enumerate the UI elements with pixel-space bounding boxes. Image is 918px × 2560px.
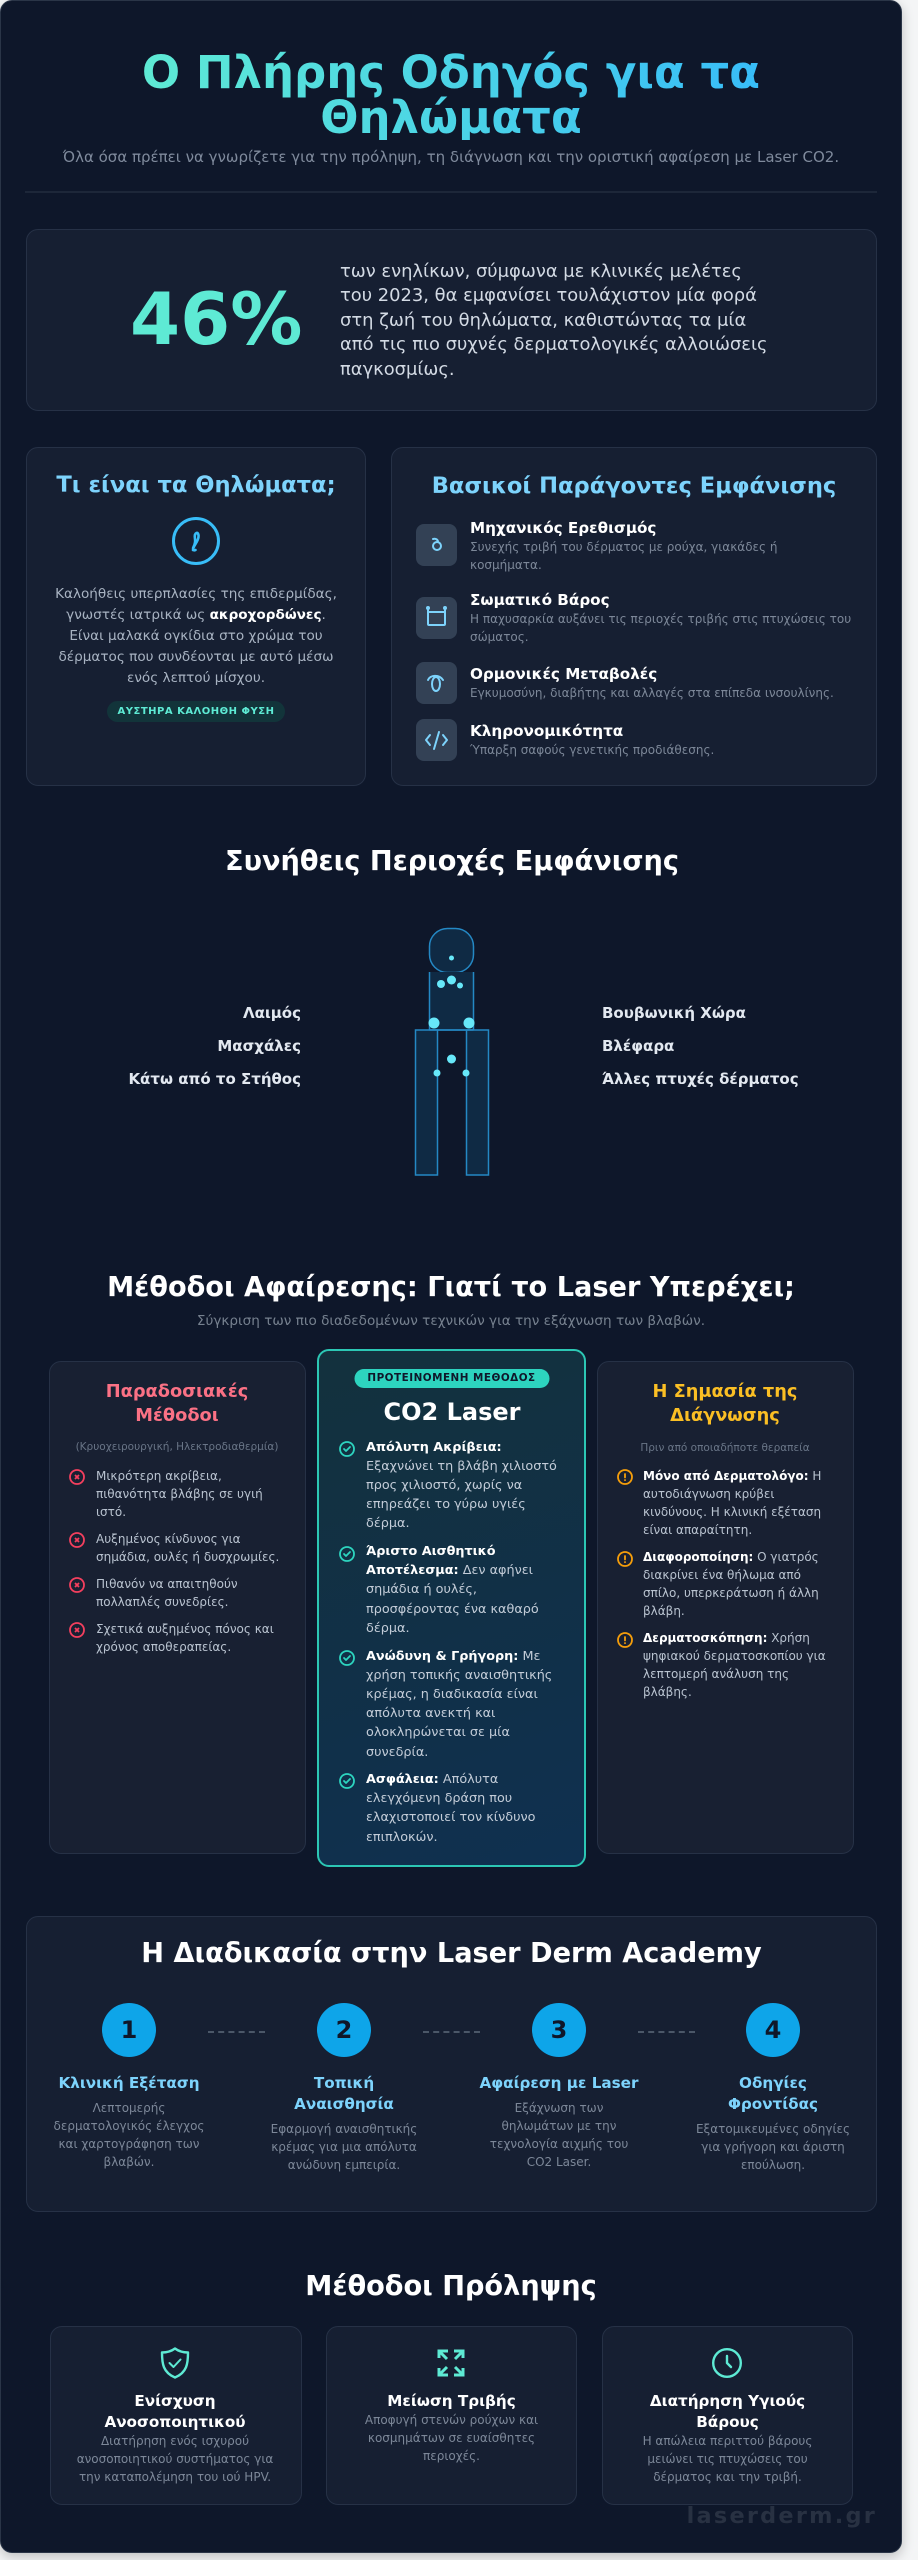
step 2 number: 2 — [336, 2016, 352, 2044]
factor text: hormonal changes: Εγκυμοσύνη, διαβήτης και αλλαγές στα επίπεδα ινσουλίνης. — [470, 686, 834, 700]
labels: left body areas: Μασχάλες — [217, 1037, 301, 1055]
step 3 number: 3 — [551, 2016, 567, 2044]
list item 2: Αυξημένος κίνδυνος για — [96, 1532, 241, 1546]
panel: CO2 laser — [317, 1349, 586, 1867]
note: dermatoscopy: Δερματοσκόπηση: Χρήση — [643, 1631, 810, 1645]
benefit: aesthetics: σημάδια ή ουλές, — [366, 1582, 477, 1597]
step 4 text — [696, 2122, 850, 2172]
benefit: safety — [366, 1772, 535, 1845]
step 2 title: Τοπική — [314, 2074, 374, 2092]
note: dermatologist: Μόνο από Δερματολόγο: Η — [643, 1469, 821, 1483]
panel: diagnosis — [597, 1361, 854, 1854]
icon: arrows — [438, 2350, 464, 2376]
title: healthy weight — [650, 2392, 805, 2431]
list item 3: πολλαπλές συνεδρίες. — [96, 1595, 228, 1609]
statistic text: του 2023, θα εμφανίσει τουλάχιστον μία φορά — [340, 285, 757, 306]
step 2 title: Αναισθησία — [294, 2095, 394, 2113]
step 3 number — [532, 2003, 586, 2057]
title: Ο Πλήρης Οδηγός για τα — [142, 46, 760, 99]
title: immune system — [104, 2392, 246, 2431]
statistic text: παγκοσμίως. — [340, 359, 455, 380]
benefit: safety: ελαχιστοποιεί τον κίνδυνο — [366, 1810, 535, 1825]
title: friction: Μείωση Τριβής — [387, 2392, 516, 2410]
text: immune system: Διατήρηση ενός ισχυρού — [101, 2434, 249, 2448]
text: friction — [365, 2413, 538, 2463]
text: healthy weight: Η απώλεια περιττού βάρους — [643, 2434, 812, 2448]
description text: Καλοήθεις υπερπλασίες της επιδερμίδας, — [55, 586, 337, 602]
heading: what are warts: Τι είναι τα Θηλώματα; — [56, 472, 336, 498]
factor text: body weight: σώματος. — [470, 630, 529, 644]
text: immune system: ανοσοποιητικού συστήματος για — [77, 2452, 273, 2466]
labels: left body areas: Λαιμός — [243, 1004, 301, 1022]
benefit: painless — [366, 1648, 552, 1760]
note: dermatologist: αυτοδιάγνωση κρύβει — [643, 1487, 774, 1501]
note: dermatoscopy: ψηφιακού δερματοσκοπίου για — [643, 1649, 826, 1663]
description text: Είναι μαλακά ογκίδια στο χρώμα του — [69, 628, 323, 644]
title: Θηλώματα — [320, 91, 582, 144]
benefit: precision: Εξαχνώνει τη βλάβη χιλιοστό — [366, 1459, 557, 1474]
step 4 text: για γρήγορη και άριστη — [701, 2140, 845, 2154]
icons: check marks — [339, 1441, 355, 1789]
labels: left body areas: Κάτω από το Στήθος — [128, 1070, 301, 1088]
benefit: precision — [366, 1440, 557, 1531]
benefit: precision: Απόλυτη Ακρίβεια: — [366, 1440, 502, 1454]
step 4 number: 4 — [765, 2016, 781, 2044]
text: friction: περιοχές. — [423, 2449, 480, 2463]
factor text: body weight: Η παχυσαρκία αυξάνει τις περιοχές τριβής στις πτυχώσεις του — [470, 612, 851, 626]
arrow: step 3 to 4 — [638, 2031, 695, 2033]
benefit: painless: Ανώδυνη & Γρήγορη: Με — [366, 1648, 540, 1664]
text: friction: Αποφυγή στενών ρούχων και — [365, 2413, 538, 2427]
text: friction: κοσμημάτων σε ευαίσθητες — [368, 2431, 535, 2445]
benefit: painless: χρήση τοπικής αναισθητικής — [366, 1668, 552, 1683]
step 4 text: επούλωση. — [741, 2158, 805, 2172]
benefit: precision: επηρεάζει το γύρω υγιές — [366, 1497, 526, 1512]
note: diagnosis: Πριν από οποιαδήποτε θεραπεία — [640, 1442, 810, 1454]
note: dermatologist: κινδύνους. Η κλινική εξέταση — [643, 1505, 821, 1519]
benefit: safety: Ασφάλεια: Απόλυτα — [366, 1772, 498, 1787]
labels: right body areas: Βλέφαρα — [602, 1037, 674, 1055]
step 1 text: δερματολογικός έλεγχος — [54, 2119, 204, 2133]
note: differentiation: Διαφοροποίηση: Ο γιατρός — [643, 1550, 819, 1564]
title: healthy weight: Διατήρηση Υγιούς — [650, 2392, 805, 2410]
note: traditional methods: (Κρυοχειρουργική, Ηλεκτροδιαθερμία) — [76, 1441, 278, 1453]
factor text: heredity: Ύπαρξη σαφούς γενετικής προδιάθεσης. — [470, 743, 714, 757]
description text — [55, 586, 337, 686]
heading: prevention: Μέθοδοι Πρόληψης — [305, 2271, 597, 2302]
step 2 title — [294, 2074, 394, 2113]
step 4 title: Οδηγίες — [739, 2074, 807, 2092]
statistic number: 46% — [130, 277, 302, 361]
note: dermatoscopy: βλάβης. — [643, 1685, 692, 1699]
arrow: step 2 to 3 — [423, 2031, 480, 2033]
factor text: mechanical irritation — [470, 540, 777, 572]
labels: right body areas: Άλλες πτυχές δέρματος — [602, 1070, 799, 1088]
body diagram — [414, 928, 490, 1176]
benefit: painless: ολοκληρώνεται σε μία — [366, 1725, 510, 1740]
arrow: step 1 to 2 — [208, 2031, 265, 2033]
list item 2 — [96, 1532, 279, 1564]
step 4 title: Φροντίδας — [728, 2095, 818, 2113]
icons: cross marks — [69, 1469, 85, 1638]
panel: key factors — [391, 447, 877, 786]
panel: traditional methods — [49, 1361, 306, 1854]
note: dermatologist: είναι απαραίτητη. — [643, 1523, 752, 1537]
icon: clock — [712, 2348, 742, 2378]
text: healthy weight — [643, 2434, 812, 2484]
step 3 text: CO2 Laser. — [527, 2155, 591, 2169]
icon: heredity code — [416, 719, 457, 761]
heading: traditional methods — [106, 1381, 248, 1426]
step 2 text — [271, 2122, 417, 2172]
list item 2: σημάδια, ουλές ή δυσχρωμίες. — [96, 1550, 279, 1564]
statistic text: από τις πιο συχνές δερματολογικές αλλοιώσεις — [340, 334, 768, 355]
note: differentiation: διακρίνει ένα θήλωμα από — [643, 1568, 801, 1582]
benefit: safety: ελεγχόμενη δράση που — [366, 1791, 512, 1806]
heading: key factors: Βασικοί Παράγοντες Εμφάνισης — [432, 473, 836, 499]
benefit: precision: προς χιλιοστό, χωρίς να — [366, 1478, 522, 1493]
badge: recommended — [354, 1369, 549, 1388]
subtitle: Όλα όσα πρέπει να γνωρίζετε για την πρόληψη, τη διάγνωση και την οριστική αφαίρεση με Laser CO2. — [63, 148, 839, 166]
benefit: painless: κρέμας, η διαδικασία είναι — [366, 1687, 538, 1702]
benefit: aesthetics: Άριστο Αισθητικό — [366, 1544, 496, 1559]
labels: right body areas — [602, 1004, 799, 1088]
icon: shield — [160, 2347, 190, 2379]
watermark: laserderm.gr — [687, 2503, 877, 2529]
text: healthy weight: μειώνει τις πτυχώσεις του — [647, 2452, 808, 2466]
note: differentiation: βλάβη. — [643, 1604, 685, 1618]
description text: γνωστές ιατρικά ως ακροχορδώνες. — [66, 607, 326, 623]
benefit: painless: συνεδρία. — [366, 1745, 428, 1760]
icon: info circle — [172, 517, 220, 565]
step 1 number — [102, 2003, 156, 2057]
panel: what are warts — [26, 447, 366, 786]
note: differentiation: σπίλο, υπερκεράτωση ή άλλη — [643, 1586, 819, 1600]
step 1 number: 1 — [121, 2016, 137, 2044]
labels: right body areas: Βουβωνική Χώρα — [602, 1004, 746, 1022]
list: traditional drawbacks — [96, 1469, 263, 1519]
heading: removal methods: Μέθοδοι Αφαίρεσης: Γιατί το Laser Υπερέχει; — [107, 1272, 795, 1303]
heading: common areas: Συνήθεις Περιοχές Εμφάνισης — [225, 846, 679, 877]
step 3 text: θηλωμάτων με την — [502, 2119, 616, 2133]
heading: traditional methods: Μέθοδοι — [135, 1404, 219, 1426]
heading: traditional methods: Παραδοσιακές — [106, 1381, 248, 1402]
factor: hormonal changes: Ορμονικές Μεταβολές — [470, 665, 657, 683]
benefit: precision: δέρμα. — [366, 1516, 410, 1531]
title: immune system: Ενίσχυση — [134, 2392, 216, 2410]
heading: diagnosis: Η Σημασία της — [653, 1381, 797, 1402]
list: traditional drawbacks: Μικρότερη ακρίβεια, — [96, 1469, 222, 1483]
heading: diagnosis: Διάγνωσης — [670, 1404, 780, 1426]
benefit: aesthetics: δέρμα. — [366, 1621, 410, 1636]
icon: body weight — [416, 597, 457, 639]
step 1 text — [54, 2101, 204, 2169]
description text: δέρματος που συνδέονται με αυτό μέσω — [58, 649, 334, 665]
step 1 title: Κλινική Εξέταση — [58, 2074, 200, 2092]
icons: warning marks — [617, 1469, 633, 1648]
labels: left body areas — [128, 1004, 301, 1088]
list item 4: Σχετικά αυξημένος πόνος και — [96, 1622, 274, 1636]
benefit: aesthetics: Αποτέλεσμα: Δεν αφήνει — [366, 1563, 533, 1578]
subheading: removal methods: Σύγκριση των πιο διαδεδομένων τεχνικών για την εξάχνωση των βλαβών. — [197, 1313, 705, 1329]
panel: friction — [326, 2326, 577, 2505]
icon: hormonal changes — [416, 662, 457, 704]
statistic text: στη ζωή του θηλώματα, καθιστώντας τα μία — [340, 310, 746, 331]
text: healthy weight: δέρματος και την τριβή. — [653, 2470, 802, 2484]
heading: CO2 laser: CO2 Laser — [384, 1398, 520, 1426]
list item 4 — [96, 1622, 274, 1654]
text: immune system: την καταπολέμηση του ιού HPV. — [79, 2470, 271, 2484]
panel: healthy weight — [602, 2326, 853, 2505]
step 4 number — [746, 2003, 800, 2057]
step 2 text: κρέμας για μια απόλυτα — [271, 2140, 417, 2154]
list item 3 — [96, 1577, 238, 1609]
title: healthy weight: Βάρους — [696, 2413, 759, 2431]
statistic text: των ενηλίκων, σύμφωνα με κλινικές μελέτες — [340, 261, 742, 282]
step 2 text: ανώδυνη εμπειρία. — [288, 2158, 400, 2172]
note: dermatologist — [643, 1469, 821, 1537]
badge: benign: ΑΥΣΤΗΡΑ ΚΑΛΟΗΘΗ ΦΥΣΗ — [118, 706, 274, 717]
note: dermatoscopy — [643, 1631, 826, 1699]
step 2 text: Εφαρμογή αναισθητικής — [271, 2122, 417, 2136]
benefit: safety: επιπλοκών. — [366, 1830, 438, 1845]
factor text: mechanical irritation: Συνεχής τριβή του δέρματος με ρούχα, γιακάδες ή — [470, 540, 777, 554]
title: immune system: Ανοσοποιητικού — [104, 2413, 246, 2431]
factor text: mechanical irritation: κοσμήματα. — [470, 558, 542, 572]
step 1 text: Λεπτομερής — [93, 2101, 165, 2115]
list item 3: Πιθανόν να απαιτηθούν — [96, 1577, 238, 1591]
note: differentiation — [643, 1550, 819, 1618]
icon: mechanical irritation — [416, 524, 457, 566]
text: immune system — [77, 2434, 273, 2484]
list item 4: χρόνος αποθεραπείας. — [96, 1640, 231, 1654]
note: dermatoscopy: λεπτομερή ανάλυση της — [643, 1667, 789, 1681]
heading: process: Η Διαδικασία στην Laser Derm Academy — [141, 1938, 762, 1969]
step 1 text: βλαβών. — [104, 2155, 154, 2169]
factor: heredity: Κληρονομικότητα — [470, 722, 623, 740]
step 3 title: Αφαίρεση με Laser — [480, 2074, 638, 2092]
badge: benign — [107, 701, 285, 722]
badge: recommended: ΠΡΟΤΕΙΝΟΜΕΝΗ ΜΕΘΟΔΟΣ — [367, 1372, 536, 1384]
step 1 text: και χαρτογράφηση των — [58, 2137, 200, 2151]
benefit: aesthetics — [366, 1544, 539, 1636]
step 4 title — [728, 2074, 818, 2113]
list: traditional drawbacks: πιθανότητα βλάβης σε υγιή — [96, 1487, 263, 1501]
list: traditional drawbacks: ιστό. — [96, 1505, 126, 1519]
step 2 number — [317, 2003, 371, 2057]
title — [142, 50, 760, 140]
description text: ενός λεπτού μίσχου. — [127, 670, 265, 686]
step 3 text: Εξάχνωση των — [515, 2101, 603, 2115]
factor: mechanical irritation: Μηχανικός Ερεθισμός — [470, 519, 656, 537]
benefit: painless: απόλυτα ανεκτή και — [366, 1706, 495, 1721]
heading: diagnosis — [653, 1381, 797, 1426]
panel: statistic — [26, 229, 877, 411]
panel: immune system — [50, 2326, 302, 2505]
step 3 text — [490, 2101, 628, 2169]
factor text: body weight — [470, 612, 851, 644]
panel: process — [26, 1916, 877, 2212]
step 3 text: τεχνολογία αιχμής του — [490, 2137, 628, 2151]
factor: body weight: Σωματικό Βάρος — [470, 591, 610, 609]
benefit: aesthetics: προσφέροντας ένα καθαρό — [366, 1602, 539, 1617]
step 4 text: Εξατομικευμένες οδηγίες — [696, 2122, 850, 2136]
statistic text — [340, 261, 768, 380]
